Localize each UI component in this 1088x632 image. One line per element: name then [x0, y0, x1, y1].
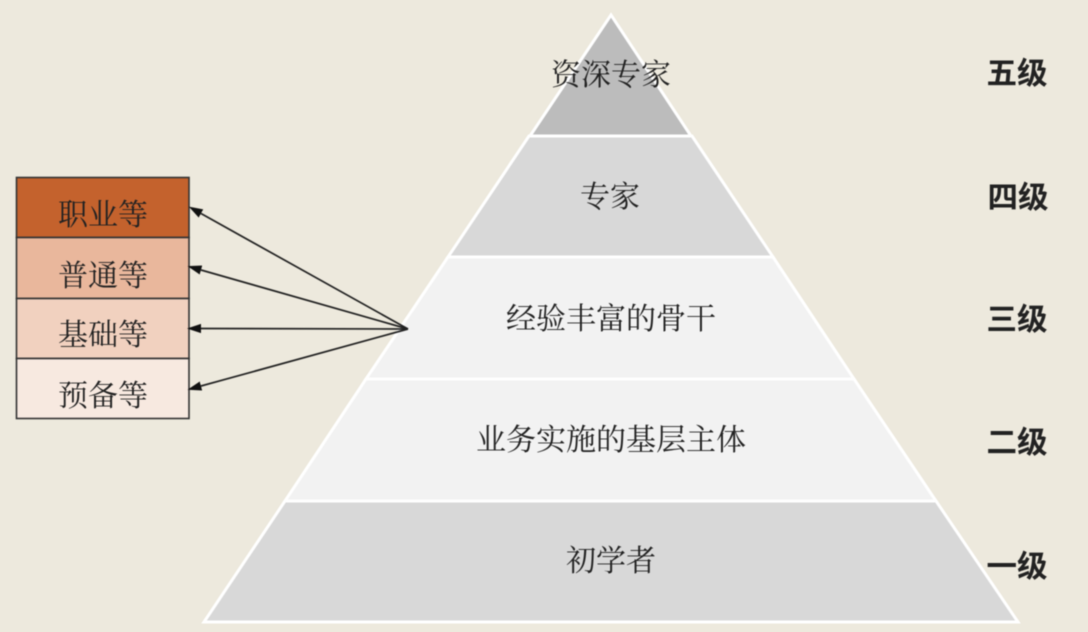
pyramid tier: 经验丰富的骨干 [366, 257, 854, 379]
label: 资深专家: 资深专家 [551, 59, 671, 92]
grade box: 基础等 [16, 298, 189, 358]
pyramid tier: 初学者 [204, 501, 1018, 622]
pyramid labels [476, 59, 746, 578]
level: 二级: 二级 [986, 426, 1048, 460]
label: 职业等: 职业等 [58, 199, 148, 232]
grade labels [58, 199, 148, 413]
level: 三级: 三级 [986, 303, 1048, 337]
arrow to 预备等 [201, 329, 408, 386]
grade stack [16, 178, 189, 418]
level: 一级: 一级 [986, 550, 1048, 584]
label: 专家: 专家 [580, 181, 640, 214]
pyramid tier: 专家 [448, 136, 773, 257]
pyramid [204, 15, 1018, 622]
level labels [986, 57, 1048, 584]
pyramid tier: 资深专家 [530, 15, 691, 136]
level: 四级: 四级 [988, 181, 1048, 215]
arrow to 普通等 [201, 270, 408, 329]
label: 初学者: 初学者 [566, 545, 656, 578]
grade box: 普通等 [16, 238, 189, 298]
label: 预备等: 预备等 [58, 380, 148, 413]
label: 普通等: 普通等 [58, 260, 148, 293]
arrow to 基础等 [201, 328, 408, 330]
arrows [201, 214, 408, 386]
pyramid tier: 业务实施的基层主体 [285, 379, 936, 501]
level: 五级: 五级 [986, 57, 1048, 91]
label: 基础等: 基础等 [58, 319, 148, 352]
label: 经验丰富的骨干: 经验丰富的骨干 [506, 303, 716, 336]
grade box: 职业等 [16, 178, 189, 238]
arrow to 职业等 [201, 214, 408, 329]
grade box: 预备等 [16, 358, 189, 418]
label: 业务实施的基层主体: 业务实施的基层主体 [476, 424, 746, 457]
